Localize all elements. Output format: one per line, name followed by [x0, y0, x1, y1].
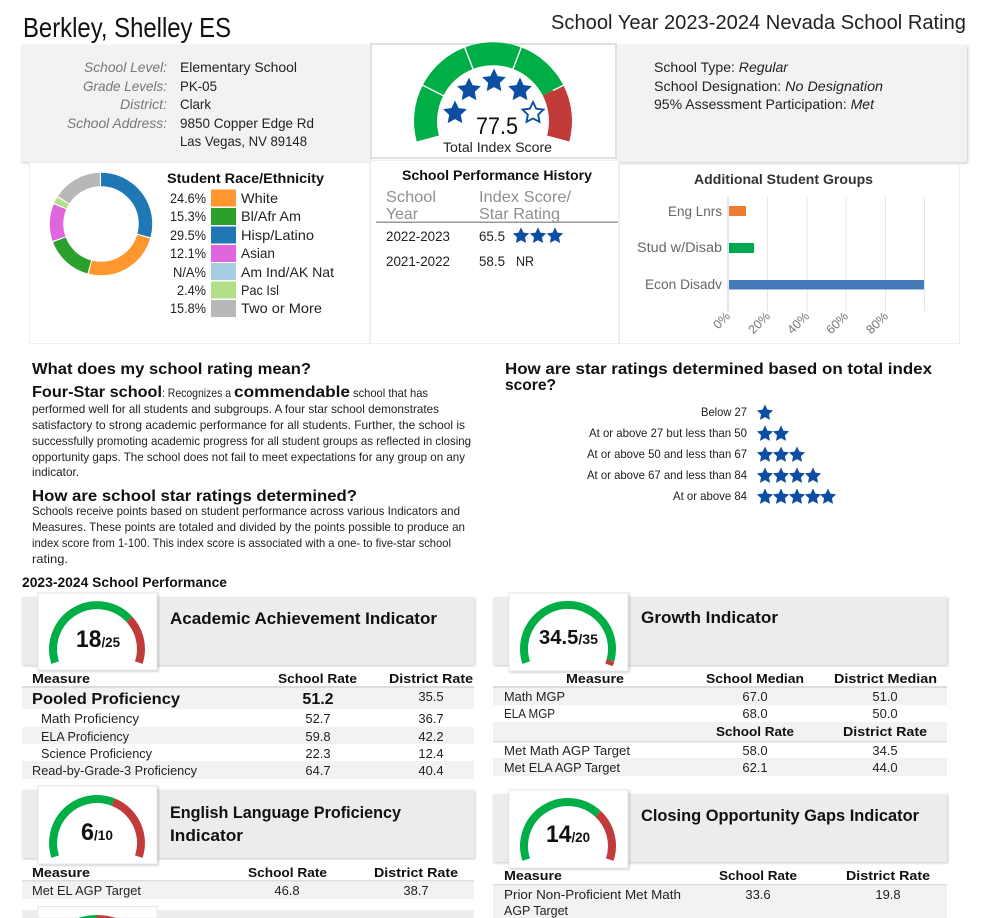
legend: White — [241, 190, 278, 206]
table: AGP Target — [504, 903, 568, 918]
table: 58.0 — [742, 743, 768, 758]
panel: academic achievement indicator — [22, 593, 474, 779]
table: 59.8 — [305, 729, 331, 744]
legend: Am Ind/AK Nat — [241, 264, 334, 280]
heading: school performance: 2023-2024 School Performance — [22, 575, 227, 590]
legend: 15.8% — [170, 300, 206, 316]
table: 36.7 — [418, 711, 444, 726]
panel: school performance history — [370, 160, 618, 344]
table: ELA MGP — [504, 706, 555, 721]
icon: unearned star — [523, 102, 543, 122]
table: 33.6 — [745, 887, 771, 902]
bar chart: Eng Lnrs — [668, 204, 722, 219]
legend: 2.4% — [177, 282, 206, 298]
panel: additional student groups — [620, 164, 960, 344]
text block: four-star school: successfully promoting academic progress for all student groups as reflected in closing — [32, 434, 471, 448]
table: Prior Non-Proficient Met Math — [504, 887, 681, 902]
text block: star rating explanation — [32, 504, 465, 566]
table: Met ELA AGP Target — [504, 760, 620, 775]
table: School Rate — [248, 865, 327, 880]
table: 42.2 — [418, 729, 444, 744]
table: District Rate — [846, 868, 930, 883]
panel: school details: School Address: — [67, 115, 167, 131]
text block: four-star school: school that has — [353, 386, 428, 400]
panel: school details: PK-05 — [180, 78, 217, 94]
table: Measure — [504, 868, 562, 883]
table: 68.0 — [742, 706, 768, 721]
text block: four-star school: Four-Star school — [32, 384, 162, 401]
star rating scale: At or above 67 and less than 84 — [587, 468, 747, 482]
heading: how are school star ratings determined: How are school star ratings determined? — [32, 488, 357, 505]
table: 12.4 — [418, 746, 444, 761]
panel: next indicator, cropped at page edge — [22, 906, 474, 918]
table: Math MGP — [504, 689, 565, 704]
table: 51.0 — [872, 689, 898, 704]
table — [22, 671, 474, 779]
panel: school details: District: — [120, 96, 167, 112]
bar chart: 40% — [785, 309, 812, 337]
gauge 18 of 25 — [53, 605, 141, 663]
panel: growth indicator — [493, 593, 947, 776]
table: 40.4 — [418, 763, 444, 778]
gauge, cropped — [78, 915, 116, 918]
panel: english language proficiency indicator — [22, 786, 474, 899]
text block: star rating explanation: Schools receive points based on student performance across various Indicators and — [32, 504, 460, 518]
text block: star rating explanation: rating. — [32, 552, 68, 566]
table: Read-by-Grade-3 Proficiency — [32, 763, 197, 778]
score value: 77.5 — [476, 113, 518, 140]
title: school name: Berkley, Shelley ES — [23, 12, 231, 43]
indicator title — [170, 804, 402, 845]
table: District Rate — [389, 671, 473, 686]
panel: closing opportunity gaps indicator — [493, 790, 947, 918]
indicator title: Academic Achievement Indicator — [170, 610, 438, 628]
gauge 6 of 10 — [53, 799, 141, 857]
score label: Total Index Score — [443, 140, 552, 155]
table: 44.0 — [872, 760, 898, 775]
groups heading: Additional Student Groups — [694, 172, 873, 187]
bar chart: Econ Disadv — [645, 277, 722, 292]
history row 2021-2022: NR — [516, 253, 534, 269]
panel: school details: Elementary School — [180, 59, 297, 75]
star rating scale: Below 27 — [701, 405, 747, 419]
table: 51.2 — [302, 691, 334, 708]
legend: N/A% — [173, 264, 206, 280]
text block: star rating explanation: index score from 1-100. This index score is associated with a one- to five-star school — [32, 536, 451, 550]
star rating scale — [587, 404, 836, 504]
score 18 of 25: 18/25 — [76, 626, 120, 653]
donut chart — [56, 180, 146, 268]
history row 2021-2022 — [386, 253, 534, 269]
legend: Hisp/Latino — [241, 227, 314, 243]
score 14 of 20: 14/20 — [546, 821, 590, 848]
legend: Asian — [241, 245, 275, 261]
heading: how star ratings are determined from index score — [505, 361, 932, 394]
bar chart: 60% — [824, 309, 851, 337]
table: Met Math AGP Target — [504, 743, 630, 758]
gauge 34.5 of 35 — [524, 605, 612, 665]
panel: school type details: 95% Assessment Participation: Met — [654, 96, 875, 112]
panel: school details: School Level: — [84, 59, 167, 75]
legend: Two or More — [241, 300, 322, 316]
legend heading: Student Race/Ethnicity — [167, 171, 325, 186]
table: Pooled Proficiency — [32, 691, 180, 708]
star rating scale: At or above 84 — [673, 489, 747, 503]
bar chart: 0% — [710, 309, 733, 332]
bar chart: 80% — [864, 309, 891, 337]
history column headers: School — [386, 189, 436, 206]
star rating scale: At or above 27 but less than 50 — [589, 426, 747, 440]
table: 38.7 — [403, 883, 429, 898]
table: 46.8 — [274, 883, 300, 898]
history row 2021-2022: 58.5 — [479, 253, 505, 269]
history row 2022-2023: 2022-2023 — [386, 228, 450, 244]
heading: what does my school rating mean: What does my school rating mean? — [32, 361, 311, 378]
text block: four-star school: : Recognizes a — [162, 386, 231, 400]
indicator title: Closing Opportunity Gaps Indicator — [641, 807, 920, 825]
table: Science Proficiency — [41, 746, 152, 761]
table: 22.3 — [305, 746, 331, 761]
table — [493, 868, 947, 918]
panel: school details: Las Vegas, NV 89148 — [180, 133, 307, 149]
panel: school type details — [617, 45, 967, 162]
table — [493, 671, 947, 776]
panel: school details — [21, 45, 370, 162]
text block: star rating explanation: Measures. These points are totaled and divided by the points possible to produce an — [32, 520, 465, 534]
table: School Rate — [719, 868, 797, 883]
score 34.5 of 35: 34.5/35 — [539, 627, 598, 649]
table: School Rate — [716, 724, 794, 739]
table: Measure — [32, 865, 90, 880]
table: 19.8 — [875, 887, 901, 902]
legend: 24.6% — [170, 190, 206, 206]
history row 2022-2023: 65.5 — [479, 228, 505, 244]
table: 62.1 — [742, 760, 768, 775]
legend: Bl/Afr Am — [241, 208, 301, 224]
star rating scale: At or above 50 and less than 67 — [587, 447, 747, 461]
table: 35.5 — [418, 689, 444, 704]
table: School Rate — [278, 671, 357, 686]
heading: how star ratings are determined from index score: score? — [505, 377, 556, 394]
table: School Median — [706, 671, 804, 686]
table: ELA Proficiency — [41, 729, 129, 744]
panel: school details: Grade Levels: — [83, 78, 167, 94]
table: District Median — [834, 671, 937, 686]
text block: four-star school: indicator. — [32, 465, 79, 479]
panel: school details: 9850 Copper Edge Rd — [180, 115, 314, 131]
text block: four-star school: satisfactory to strong academic performance for all students. Further, the school is — [32, 418, 465, 432]
title: school year and rating: School Year 2023-2024 Nevada School Rating — [551, 12, 966, 34]
panel: student race and ethnicity — [30, 162, 370, 344]
panel: school type details: School Type: Regular — [654, 59, 789, 75]
table: Measure — [566, 671, 624, 686]
gauge 14 of 20 — [524, 802, 612, 860]
history column headers: Year — [386, 206, 419, 223]
text block: four-star school: performed well for all students and subgroups. A four star school demonstrates — [32, 402, 439, 416]
legend: 29.5% — [170, 227, 206, 243]
history row 2021-2022: 2021-2022 — [386, 253, 450, 269]
history heading: School Performance History — [402, 168, 593, 183]
legend: 15.3% — [170, 208, 206, 224]
table: 67.0 — [742, 689, 768, 704]
legend — [170, 190, 334, 317]
legend: 12.1% — [170, 245, 206, 261]
table: 52.7 — [305, 711, 331, 726]
panel: total index score gauge — [371, 44, 616, 158]
history column headers: Index Score/ — [479, 189, 572, 206]
history row 2022-2023 — [386, 227, 563, 244]
panel: school details: Clark — [180, 96, 212, 112]
table: 50.0 — [872, 706, 898, 721]
score 6 of 10: 6/10 — [81, 819, 113, 846]
table: District Rate — [843, 724, 927, 739]
table: Measure — [32, 671, 90, 686]
text block: four-star school: opportunity gaps. The school does not fail to meet expectations for any group on any — [32, 450, 465, 464]
heading: how star ratings are determined from index score: How are star ratings determined based on total index — [505, 361, 932, 378]
table: 64.7 — [305, 763, 331, 778]
table: Met EL AGP Target — [32, 883, 141, 898]
table: 34.5 — [872, 743, 898, 758]
table: District Rate — [374, 865, 458, 880]
indicator title: Indicator — [170, 827, 244, 845]
history column headers: Star Rating — [479, 206, 560, 223]
table: Math Proficiency — [41, 711, 140, 726]
indicator title: English Language Proficiency — [170, 804, 402, 822]
bar chart: Stud w/Disab — [637, 240, 722, 255]
history column headers — [386, 189, 572, 223]
legend: Pac Isl — [241, 282, 279, 298]
icon: earned stars — [443, 68, 532, 123]
bar chart: 20% — [746, 309, 773, 337]
indicator title: Growth Indicator — [641, 609, 779, 627]
text block: four-star school: commendable — [234, 384, 350, 401]
bar chart — [637, 197, 924, 337]
panel: school type details: School Designation: No Designation — [654, 78, 883, 94]
table — [22, 865, 474, 899]
text block: four-star school — [32, 384, 471, 479]
